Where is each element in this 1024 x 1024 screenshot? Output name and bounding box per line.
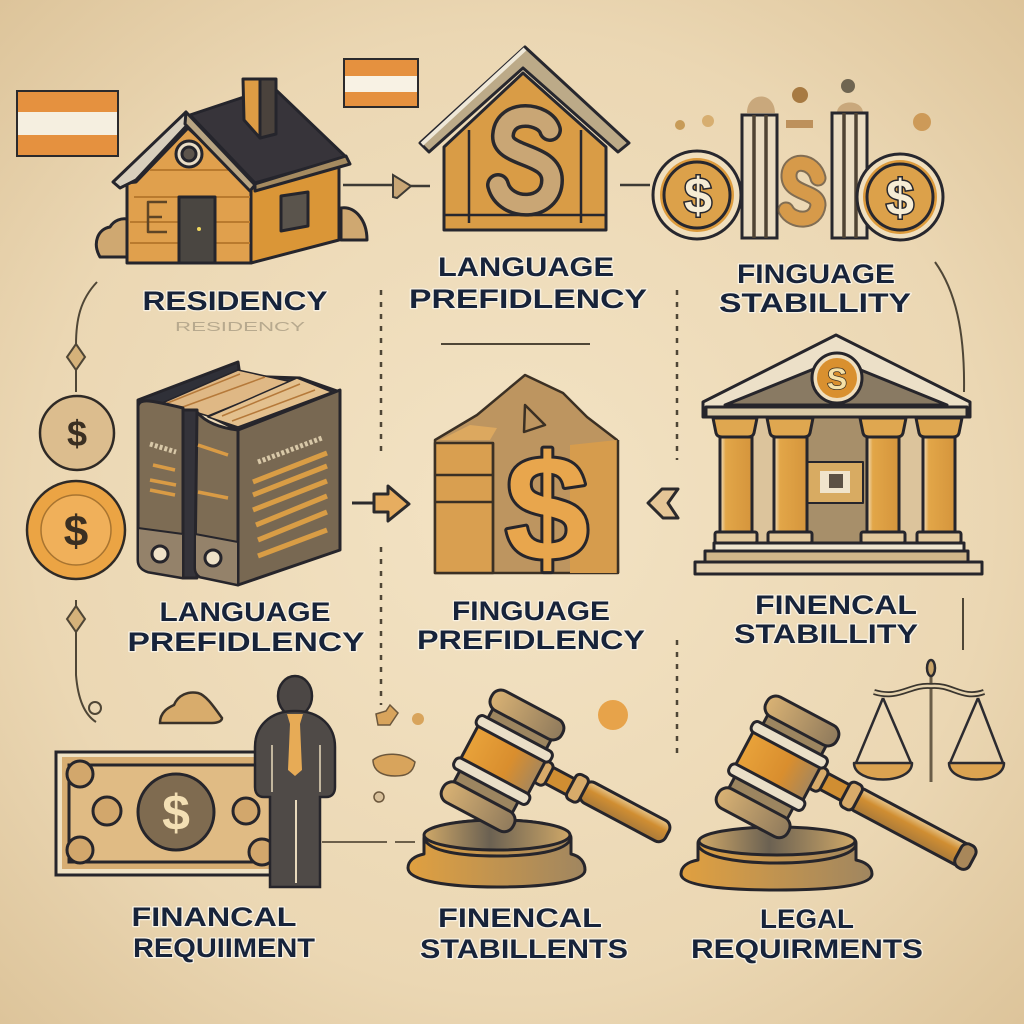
icon: house with S: [420, 47, 629, 230]
icon: gavel centre: [408, 686, 691, 901]
heading: legal requirements: REQUIRMENTS: [691, 934, 923, 964]
heading: financial requirement: FINANCAL: [132, 902, 296, 932]
heading: language proficiency middle: LANGUAGE: [160, 597, 330, 627]
heading: financial stability top: STABILLITY: [719, 288, 911, 318]
baseline strokes: [322, 841, 415, 843]
heading: residency: RESIDENCY: [142, 286, 328, 316]
arrow: house to coins: [620, 184, 650, 186]
icon: stone with dollar: $: [505, 424, 589, 592]
heading: language proficiency top: LANGUAGE: [438, 252, 614, 282]
heading: financial stabillents: [420, 903, 628, 964]
heading: financial requirement: [132, 902, 316, 963]
icon: bank: [695, 335, 982, 574]
decorative fragments: [373, 700, 628, 802]
heading: financial stability middle: STABILLITY: [734, 619, 918, 649]
coin: large: [27, 481, 125, 579]
heading: financial stability middle: [734, 590, 918, 649]
arrow: residency to language: [343, 175, 430, 198]
heading: language proficiency top: [409, 252, 647, 314]
icon: banknote: $: [162, 785, 190, 841]
icon: stone with dollar: [435, 375, 618, 592]
heading: finguage proficiency middle: [417, 596, 645, 655]
heading: financial stabillents: FINENCAL: [438, 903, 602, 933]
flag: centre: [344, 59, 418, 107]
heading: finguage proficiency middle: FINGUAGE: [452, 596, 610, 626]
arrow: stone to bank: [648, 489, 678, 518]
heading: financial stabillents: STABILLENTS: [420, 934, 628, 964]
icon: coins and columns: $: [684, 168, 712, 224]
coin: large: $: [64, 507, 88, 556]
coin: small: [40, 396, 114, 470]
heading: language proficiency middle: PREFIDLENCY: [128, 627, 364, 657]
icon: coins and columns: [653, 79, 943, 240]
flag: left: [17, 91, 118, 156]
icon: coins and columns: $: [886, 170, 914, 226]
icon: bank: S: [827, 363, 847, 396]
heading: financial stability middle: FINENCAL: [755, 590, 917, 620]
heading: legal requirements: [691, 904, 923, 964]
faint caption: residency: RESIDENCY: [175, 319, 306, 334]
icon: books: [138, 362, 340, 585]
coin: small: $: [67, 413, 87, 454]
heading: financial requirement: REQUIIMENT: [133, 933, 316, 963]
icon: mound: [160, 692, 222, 723]
heading: language proficiency middle: [128, 597, 364, 657]
heading: financial stability top: FINGUAGE: [737, 259, 895, 289]
arrow: books to stone: [352, 486, 409, 521]
heading: finguage proficiency middle: PREFIDLENCY: [417, 625, 645, 655]
icon: banknote: [56, 752, 275, 875]
heading: financial stability top: [719, 259, 911, 318]
icon: person: [255, 676, 335, 887]
heading: legal requirements: LEGAL: [760, 904, 854, 934]
icon: residency house: [96, 79, 367, 263]
icon: gavel right: [681, 692, 998, 924]
heading: language proficiency top: PREFIDLENCY: [409, 284, 647, 314]
icon: scales: [854, 660, 1004, 782]
connectors: dashed and curved: [67, 262, 964, 755]
